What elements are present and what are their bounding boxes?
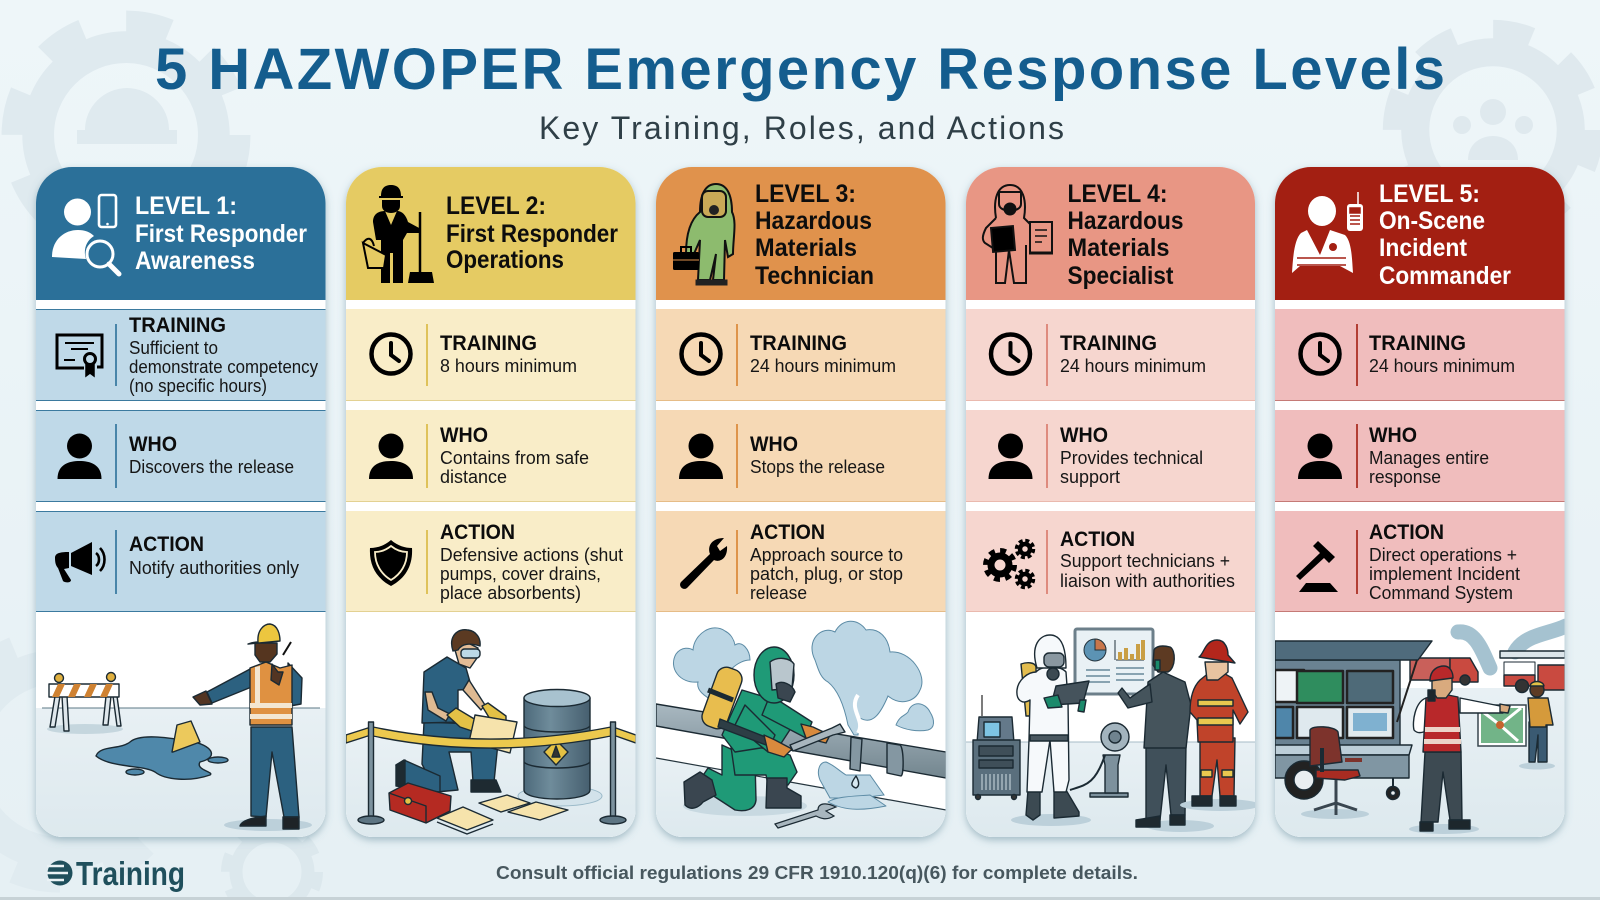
level 4 heading: Hazardous bbox=[1068, 207, 1184, 235]
level 3 heading: Materials bbox=[755, 234, 857, 262]
level 3 action row: ACTION bbox=[750, 521, 825, 544]
panel: level 3 bbox=[656, 167, 946, 838]
level 5 heading bbox=[1379, 180, 1511, 290]
small firefighter at map bbox=[1519, 682, 1555, 770]
level 2 training row: TRAINING bbox=[440, 332, 537, 355]
level 1 action row: ACTION bbox=[129, 533, 204, 556]
level 2 who row bbox=[346, 410, 636, 502]
level 5 action row: Direct operations + bbox=[1369, 545, 1517, 565]
icon: shield bbox=[370, 540, 412, 586]
icon: specialist with clipboard and book bbox=[983, 185, 1053, 283]
level 3 action row: release bbox=[750, 583, 807, 603]
level 3 header bbox=[656, 167, 946, 300]
level 4 header bbox=[966, 167, 1255, 300]
site map bbox=[1478, 705, 1526, 746]
level 2 who row: WHO bbox=[440, 424, 488, 447]
logo bbox=[47, 855, 185, 892]
level 4 who row: support bbox=[1060, 467, 1120, 487]
subtitle: Key Training, Roles, and Actions bbox=[539, 110, 1064, 146]
level 5 who row bbox=[1275, 410, 1564, 502]
smoke bbox=[1458, 626, 1566, 668]
commander bbox=[1409, 666, 1510, 834]
icon: megaphone bbox=[55, 542, 104, 582]
level 3 action row: Approach source to bbox=[750, 545, 903, 565]
barricade bbox=[49, 672, 121, 731]
wrench on floor bbox=[775, 804, 836, 828]
level 1 training row bbox=[36, 309, 326, 401]
caution tape and posts bbox=[346, 722, 636, 824]
vapor clouds bbox=[673, 621, 934, 798]
level 3 training row: TRAINING bbox=[750, 332, 847, 355]
icon: gavel bbox=[1296, 541, 1338, 592]
level 4 action row: Support technicians + bbox=[1060, 551, 1230, 571]
level 3 heading: Hazardous bbox=[755, 207, 872, 235]
level 4 heading: Materials bbox=[1068, 234, 1170, 262]
level 1 training row: demonstrate competency bbox=[129, 357, 318, 377]
gauge stand bbox=[1070, 723, 1129, 797]
worker kneeling bbox=[396, 630, 517, 792]
level 2 training row: 8 hours minimum bbox=[440, 356, 577, 376]
icon: commander with vest and radio bbox=[1292, 192, 1363, 273]
level 3 heading bbox=[755, 180, 874, 290]
level 1 training row: TRAINING bbox=[129, 314, 226, 337]
level 1 header bbox=[36, 167, 326, 300]
panel: level 4 bbox=[966, 167, 1260, 838]
office chair bbox=[1301, 727, 1369, 819]
panel: level 5 bbox=[1275, 167, 1566, 838]
level 5 header bbox=[1275, 167, 1564, 300]
icon: certificate bbox=[57, 335, 102, 376]
level 2 header bbox=[346, 167, 636, 300]
panel: level 2 bbox=[346, 167, 636, 838]
specialist in white suit bbox=[1011, 635, 1091, 826]
manager in suit bbox=[1118, 646, 1214, 832]
level 2 heading: LEVEL 2: bbox=[446, 192, 546, 220]
technician in green suit bbox=[683, 647, 845, 816]
illustration: worker reporting spill bbox=[36, 612, 326, 838]
level 2 who row: distance bbox=[440, 467, 507, 487]
level 5 action row: implement Incident bbox=[1369, 564, 1520, 584]
level 2 action row: pumps, cover drains, bbox=[440, 564, 601, 584]
level 3 action row: patch, plug, or stop bbox=[750, 564, 903, 584]
icon: person with phone and magnifier bbox=[52, 195, 119, 274]
level 1 who row: Discovers the release bbox=[129, 457, 294, 477]
level 5 who row: response bbox=[1369, 467, 1441, 487]
fire trucks bbox=[1410, 651, 1565, 692]
icon: green hazmat suit with toolbox bbox=[673, 184, 735, 284]
level 5 who row: Manages entire bbox=[1369, 448, 1489, 468]
command trailer bbox=[1275, 641, 1432, 800]
level 3 training row bbox=[656, 309, 946, 401]
illustration: specialist briefing responders bbox=[966, 612, 1260, 838]
level 2 action row: place absorbents) bbox=[440, 583, 581, 603]
icon: gears bbox=[986, 540, 1034, 588]
logo: Training bbox=[76, 855, 185, 892]
panel: level 1 bbox=[36, 167, 326, 838]
level 2 action row bbox=[346, 511, 636, 612]
level 3 who row: WHO bbox=[750, 433, 798, 456]
level 1 training row: (no specific hours) bbox=[129, 376, 267, 396]
toolbox and absorbent pads bbox=[389, 783, 568, 834]
level 4 heading: Specialist bbox=[1068, 262, 1174, 290]
level 5 training row: 24 hours minimum bbox=[1369, 356, 1515, 376]
level 4 heading: LEVEL 4: bbox=[1068, 180, 1168, 208]
firefighter bbox=[1180, 640, 1260, 811]
level 4 heading bbox=[1068, 180, 1184, 290]
level 2 heading: Operations bbox=[446, 246, 564, 274]
level 5 heading: LEVEL 5: bbox=[1379, 180, 1480, 208]
level 3 action row bbox=[656, 511, 946, 612]
level 4 action row bbox=[966, 511, 1255, 612]
level 3 training row: 24 hours minimum bbox=[750, 356, 896, 376]
level 1 heading bbox=[135, 192, 307, 275]
level 3 who row: Stops the release bbox=[750, 457, 885, 477]
leaking pipe bbox=[656, 704, 946, 809]
worker bbox=[193, 624, 312, 831]
illustration: technician patching pipe bbox=[656, 612, 946, 838]
level 4 who row: WHO bbox=[1060, 424, 1108, 447]
illustration: worker laying absorbents by barrel bbox=[346, 612, 636, 838]
level 4 training row: 24 hours minimum bbox=[1060, 356, 1206, 376]
level 4 action row: ACTION bbox=[1060, 528, 1135, 551]
level 4 who row bbox=[966, 410, 1255, 502]
illustration: command post at incident bbox=[1275, 612, 1566, 838]
data display board bbox=[1075, 629, 1153, 694]
level 1 action row bbox=[36, 511, 326, 612]
level 1 who row bbox=[36, 410, 326, 502]
level 5 training row bbox=[1275, 309, 1564, 401]
level 2 action row: ACTION bbox=[440, 521, 515, 544]
level 5 action row bbox=[1275, 511, 1564, 612]
level 4 training row: TRAINING bbox=[1060, 332, 1157, 355]
level 3 who row bbox=[656, 410, 946, 502]
level 2 heading bbox=[446, 192, 618, 274]
level 5 heading: Incident bbox=[1379, 234, 1468, 262]
level 5 heading: Commander bbox=[1379, 262, 1511, 290]
barrel bbox=[524, 690, 590, 799]
level 3 heading: Technician bbox=[755, 262, 874, 290]
level 2 training row bbox=[346, 309, 636, 401]
level 1 action row: Notify authorities only bbox=[129, 558, 299, 578]
level 4 action row: liaison with authorities bbox=[1060, 571, 1235, 591]
footer note: Consult official regulations 29 CFR 1910.120(q)(6) for complete details. bbox=[496, 862, 1138, 883]
icon: wrench bbox=[680, 538, 727, 589]
level 5 who row: WHO bbox=[1369, 424, 1417, 447]
level 3 heading: LEVEL 3: bbox=[755, 180, 856, 208]
level 1 training row: Sufficient to bbox=[129, 338, 218, 358]
level 5 action row: Command System bbox=[1369, 583, 1513, 603]
level 2 who row: Contains from safe bbox=[440, 448, 589, 468]
level 1 who row: WHO bbox=[129, 433, 177, 456]
level 2 action row: Defensive actions (shut bbox=[440, 545, 623, 565]
level 5 action row: ACTION bbox=[1369, 521, 1444, 544]
level 2 heading: First Responder bbox=[446, 220, 618, 248]
monitoring cart bbox=[973, 695, 1020, 800]
icon: worker with bucket and broom bbox=[363, 185, 434, 283]
level 1 heading: LEVEL 1: bbox=[135, 192, 237, 220]
level 4 training row bbox=[966, 309, 1255, 401]
level 1 heading: First Responder bbox=[135, 220, 307, 248]
level 4 who row: Provides technical bbox=[1060, 448, 1203, 468]
level 5 training row: TRAINING bbox=[1369, 332, 1466, 355]
level 5 heading: On-Scene bbox=[1379, 207, 1485, 235]
level 1 heading: Awareness bbox=[135, 247, 255, 275]
title: 5 HAZWOPER Emergency Response Levels bbox=[155, 37, 1445, 102]
spill puddle bbox=[96, 721, 228, 779]
